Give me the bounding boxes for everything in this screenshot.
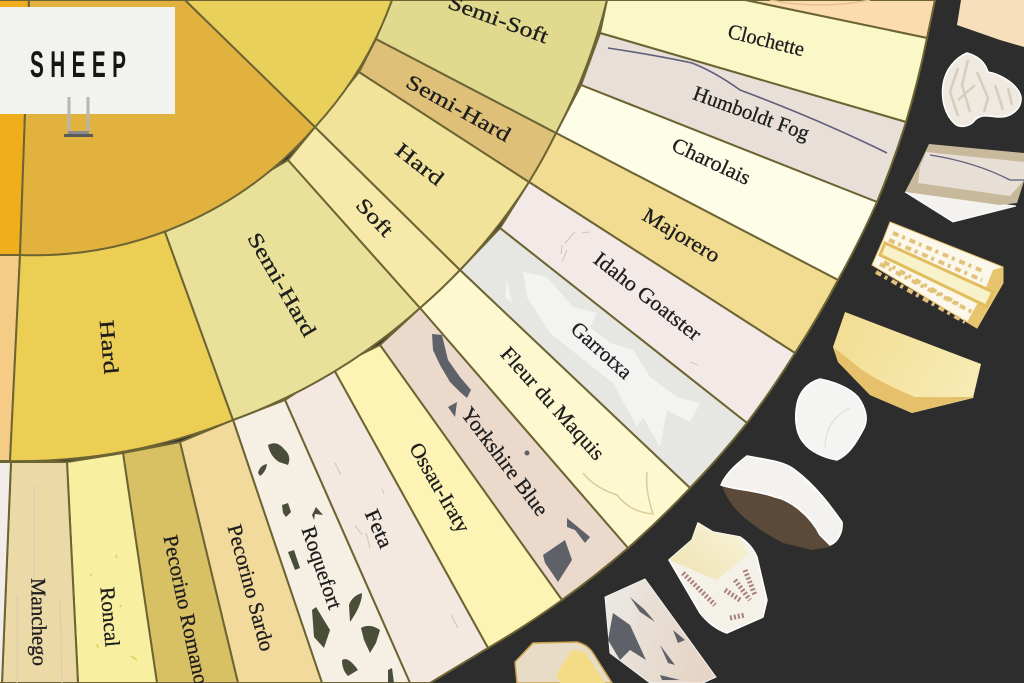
mould spots xyxy=(258,443,394,683)
slice: Roquefort: Roquefort xyxy=(297,523,347,612)
slice: Hard upper: Hard xyxy=(391,138,449,191)
slice: left peach segment xyxy=(0,255,20,461)
blue veins xyxy=(432,334,590,582)
slice: Ossau-Iraty xyxy=(333,345,562,648)
slice: Ossau-Iraty: Ossau-Iraty xyxy=(404,438,476,537)
slice: Garrotxa: Garrotxa xyxy=(566,317,638,384)
white rind patch xyxy=(505,272,700,447)
sign card xyxy=(0,7,175,114)
slice: Pecorino Sardo xyxy=(180,420,322,683)
slice: Hard upper xyxy=(315,72,529,270)
slice: Pecorino Romano: Pecorino Romano xyxy=(158,533,214,683)
slice: left pale segment xyxy=(0,462,11,683)
slice: Majorero: Majorero xyxy=(638,203,725,268)
slice: Semi-Hard lower: Semi-Hard xyxy=(242,228,322,341)
slice: Roncal xyxy=(67,453,157,683)
slice: Hard: Hard xyxy=(95,319,123,375)
icon: hard yellow wedge xyxy=(833,312,981,413)
icon: wrinkled rind cheese xyxy=(942,53,1021,126)
slice: Yorkshire Blue xyxy=(380,308,628,600)
slice: Fleur du Maquis xyxy=(420,270,690,548)
slice: Soft: Soft xyxy=(351,193,399,242)
slice: yellow neighbouring segment xyxy=(185,0,392,127)
slice: Idaho Goatster xyxy=(500,182,795,423)
slice: Clochette: Clochette xyxy=(725,19,807,61)
slice: sheep milk segment xyxy=(20,0,315,255)
slice: Roquefort xyxy=(233,400,410,683)
icon: bloomy rind block xyxy=(872,222,1003,328)
icon: bottom rind cheese xyxy=(515,642,612,683)
slice: Clochette xyxy=(600,0,927,122)
slice: Yorkshire Blue: Yorkshire Blue xyxy=(456,402,554,521)
slice: Garrotxa xyxy=(460,228,747,488)
panel: texture ring xyxy=(0,0,607,461)
slice: Fleur du Maquis: Fleur du Maquis xyxy=(496,342,610,465)
slice: Feta xyxy=(285,368,488,683)
icon: ash cheese with white rind xyxy=(721,456,842,550)
icon: blue cheese wedge xyxy=(605,579,716,683)
icon: humboldt fog wedge xyxy=(905,144,1024,222)
panel: inner milk rings xyxy=(0,0,392,255)
slice: Pecorino Sardo: Pecorino Sardo xyxy=(223,522,279,654)
slice: peach top xyxy=(745,0,935,38)
slice: Semi-Hard upper xyxy=(359,39,556,182)
slice: Feta: Feta xyxy=(360,505,398,552)
icon: peach cheese top right xyxy=(957,0,1024,47)
icon: round white goat cheese xyxy=(796,379,866,460)
label: sheep sign xyxy=(0,7,175,137)
slice: Charolais xyxy=(556,85,877,280)
slice: Semi-Hard upper: Semi-Hard xyxy=(402,70,516,147)
slice: Soft xyxy=(288,127,460,308)
slice: Hard xyxy=(10,232,233,461)
slice: Manchego: Manchego xyxy=(26,578,52,666)
slice: Semi-Soft xyxy=(376,0,607,133)
slice: Humboldt Fog xyxy=(581,33,906,202)
ash vein xyxy=(608,48,887,153)
slice: Roncal: Roncal xyxy=(95,586,125,648)
icons: cheese illustrations xyxy=(515,0,1024,683)
sign title: SHEEP xyxy=(30,45,132,86)
slice: Idaho Goatster: Idaho Goatster xyxy=(589,247,706,346)
sign stand xyxy=(64,97,93,137)
slice: Majorero xyxy=(529,133,838,353)
slice: Manchego xyxy=(2,462,78,683)
slice: Semi-Hard lower xyxy=(165,160,420,420)
slice: Pecorino Romano xyxy=(123,442,238,683)
icon: soft cheese with red veins xyxy=(669,523,767,633)
slice: orange centre segment xyxy=(0,0,29,255)
slice: Humboldt Fog: Humboldt Fog xyxy=(690,81,813,145)
slice: Charolais: Charolais xyxy=(668,132,755,190)
